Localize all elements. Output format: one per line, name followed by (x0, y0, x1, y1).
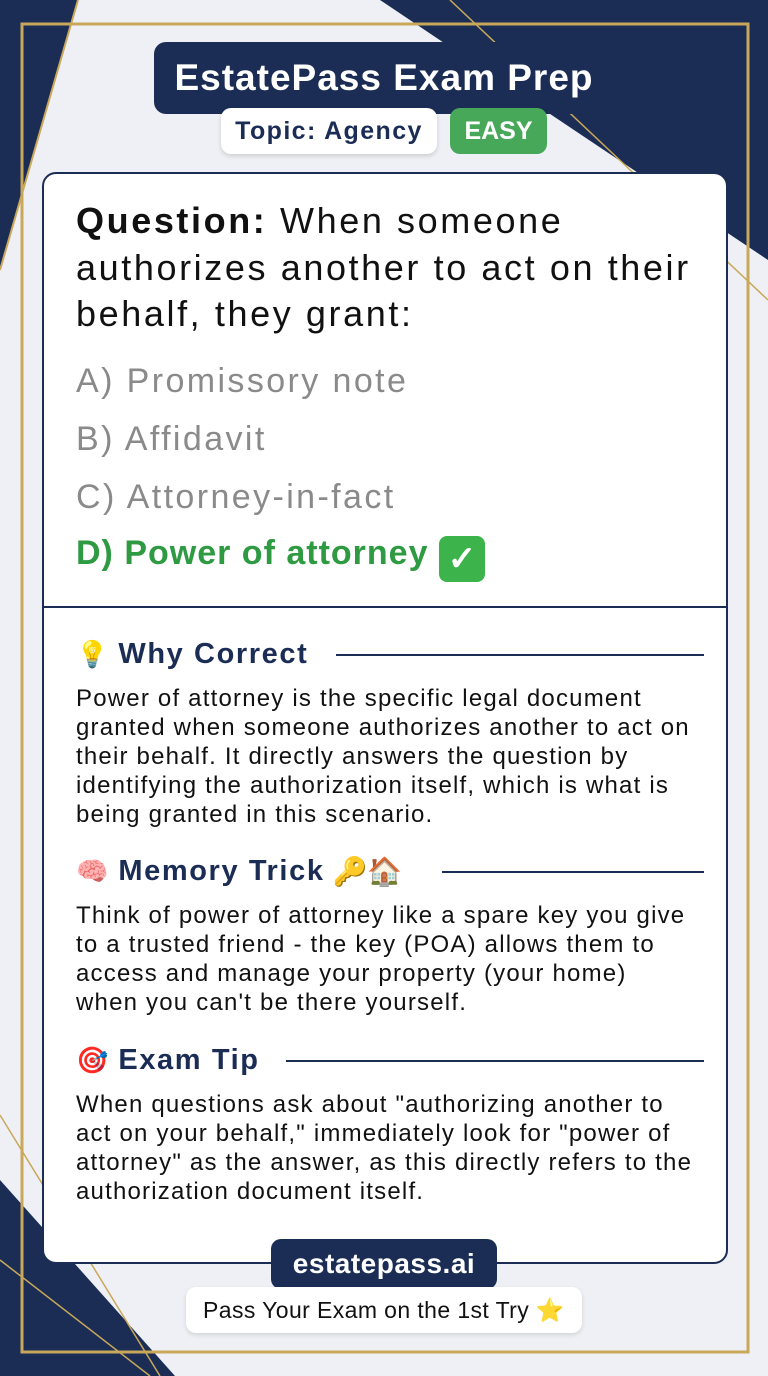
text: exam tip: act on your behalf," immediately look for "power of (76, 1120, 670, 1147)
text: why correct: Power of attorney is the specific legal document (76, 685, 642, 712)
heading: why correct: 💡 (76, 638, 108, 668)
title badge (154, 42, 614, 114)
question: authorizes another to act on their (76, 246, 691, 288)
text: why correct: identifying the authorization itself, which is what is (76, 772, 669, 799)
heading: memory trick: 🔑🏠 (333, 856, 402, 886)
text: memory trick: access and manage your property (your home) (76, 960, 627, 987)
text: exam tip: attorney" as the answer, as this directly refers to the (76, 1149, 692, 1176)
footer url badge: estatepass.ai (293, 1248, 475, 1279)
text: memory trick (76, 902, 685, 1016)
heading: exam tip: Exam Tip (118, 1044, 260, 1076)
text: memory trick: Think of power of attorney like a spare key you give (76, 902, 685, 929)
tagline pill (186, 1287, 582, 1333)
heading: memory trick (76, 854, 402, 888)
footer url badge (271, 1239, 497, 1289)
tagline pill: Pass Your Exam on the 1st Try ⭐ (203, 1297, 565, 1323)
main card (42, 172, 728, 1264)
question (76, 200, 691, 334)
heading: why correct: Why Correct (118, 638, 308, 670)
option B: B) Affidavit (76, 420, 267, 458)
option D correct: D) Power of attorney (76, 534, 428, 572)
text: why correct: granted when someone authorizes another to act on (76, 714, 690, 741)
text: why correct: being granted in this scenario. (76, 801, 433, 828)
option D correct: ✓ (448, 540, 476, 578)
text: exam tip: When questions ask about "authorizing another to (76, 1091, 664, 1118)
text: why correct: their behalf. It directly answers the question by (76, 743, 628, 770)
question: Question: When someone (76, 200, 563, 241)
text: exam tip (76, 1091, 692, 1205)
topic pill (221, 108, 437, 154)
text: memory trick: when you can't be there yourself. (76, 989, 467, 1016)
difficulty pill (450, 108, 547, 154)
heading: memory trick: 🧠 (76, 856, 108, 886)
option C: C) Attorney-in-fact (76, 478, 396, 516)
option D correct (76, 534, 485, 582)
option A: A) Promissory note (76, 362, 408, 400)
title badge: EstatePass Exam Prep (174, 57, 594, 98)
text: memory trick: to a trusted friend - the key (POA) allows them to (76, 931, 655, 958)
difficulty pill: EASY (464, 117, 533, 145)
question: behalf, they grant: (76, 293, 414, 334)
heading: exam tip: 🎯 (76, 1044, 108, 1074)
heading: memory trick: Memory Trick (118, 854, 325, 886)
text: why correct (76, 685, 690, 828)
topic pill: Topic: Agency (235, 117, 423, 145)
text: exam tip: authorization document itself. (76, 1178, 424, 1205)
